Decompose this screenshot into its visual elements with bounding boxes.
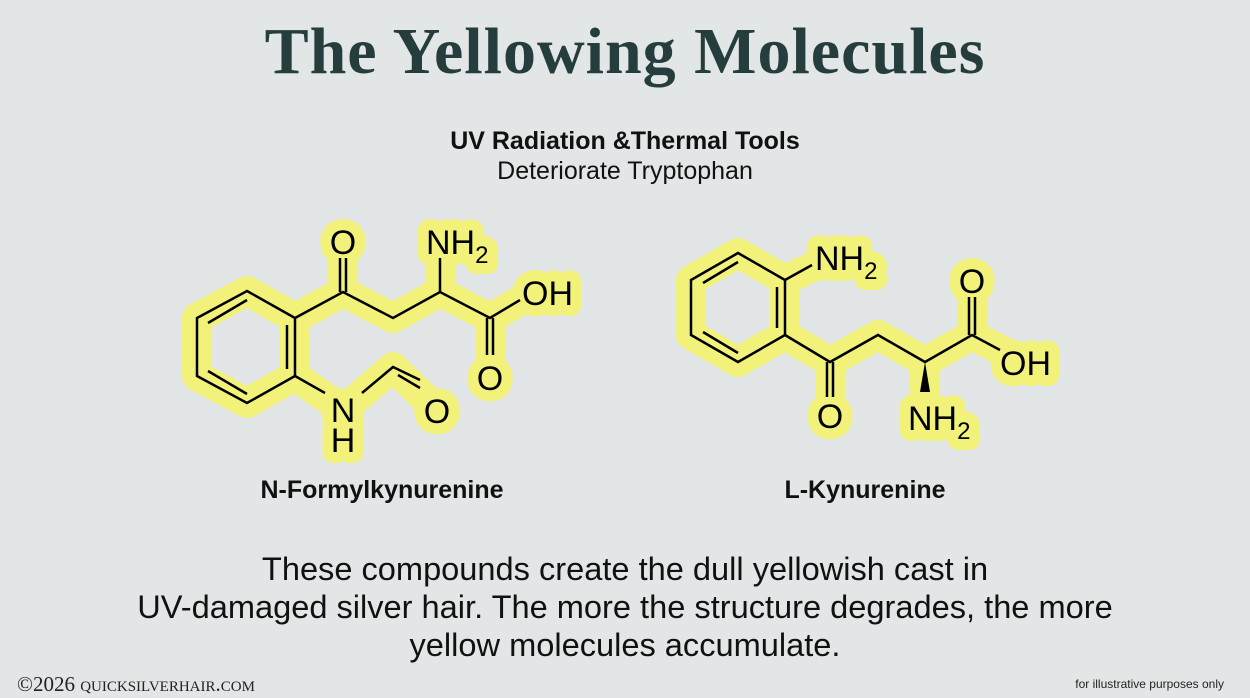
molecule: L-Kynurenine: O xyxy=(817,398,843,436)
description text: These compounds create the dull yellowish cast in xyxy=(262,550,988,587)
molecule: L-Kynurenine: 2 xyxy=(864,258,877,285)
molecule: N-Formylkynurenine: H xyxy=(331,422,355,460)
molecule: L-Kynurenine: NH xyxy=(815,240,864,278)
molecule: N-Formylkynurenine: OH xyxy=(522,275,573,313)
molecule: L-Kynurenine: 2 xyxy=(957,418,970,445)
subtitle: UV Radiation &Thermal Tools xyxy=(450,127,800,155)
molecule: N-Formylkynurenine: N xyxy=(331,392,355,430)
title: The Yellowing Molecules xyxy=(265,15,985,88)
subtitle: Deteriorate Tryptophan xyxy=(497,157,753,185)
molecule: N-Formylkynurenine: O xyxy=(477,360,503,398)
molecule: L-Kynurenine: 2 xyxy=(957,418,970,445)
molecule: N-Formylkynurenine: O xyxy=(477,360,503,398)
molecule: L-Kynurenine: NH xyxy=(908,400,957,438)
molecule: N-Formylkynurenine: O xyxy=(330,224,356,262)
molecule: N-Formylkynurenine: N xyxy=(331,392,355,430)
subtitle xyxy=(450,127,800,185)
molecule: L-Kynurenine: O xyxy=(959,263,985,301)
molecule: L-Kynurenine: OH xyxy=(1000,345,1051,383)
molecule: L-Kynurenine: O xyxy=(959,263,985,301)
molecule: L-Kynurenine: 2 xyxy=(864,258,877,285)
molecule: L-Kynurenine: OH xyxy=(1000,345,1051,383)
molecule: N-Formylkynurenine xyxy=(197,224,573,460)
molecule: N-Formylkynurenine: NH xyxy=(426,224,475,262)
molecule: N-Formylkynurenine: O xyxy=(424,393,450,431)
description text xyxy=(137,550,1113,663)
footer: disclaimer: for illustrative purposes only xyxy=(1075,677,1224,691)
description text: UV-damaged silver hair. The more the structure degrades, the more xyxy=(137,588,1113,625)
molecule: N-Formylkynurenine: NH xyxy=(426,224,475,262)
molecule: L-Kynurenine: NH xyxy=(815,240,864,278)
molecule: N-Formylkynurenine: 2 xyxy=(475,242,488,269)
molecule: N-Formylkynurenine: OH xyxy=(522,275,573,313)
footer: copyright: ©2026 quicksilverhair.com xyxy=(17,672,255,696)
molecule: N-Formylkynurenine: 2 xyxy=(475,242,488,269)
molecule: N-Formylkynurenine: O xyxy=(424,393,450,431)
molecule: L-Kynurenine: O xyxy=(817,398,843,436)
molecule: L-Kynurenine xyxy=(691,240,1051,445)
molecule: N-Formylkynurenine: H xyxy=(331,422,355,460)
description text: yellow molecules accumulate. xyxy=(410,626,840,663)
molecule: N-Formylkynurenine: O xyxy=(330,224,356,262)
label: L-Kynurenine: L-Kynurenine xyxy=(784,476,946,504)
molecule: L-Kynurenine: NH xyxy=(908,400,957,438)
label: N-Formylkynurenine: N-Formylkynurenine xyxy=(260,476,504,504)
